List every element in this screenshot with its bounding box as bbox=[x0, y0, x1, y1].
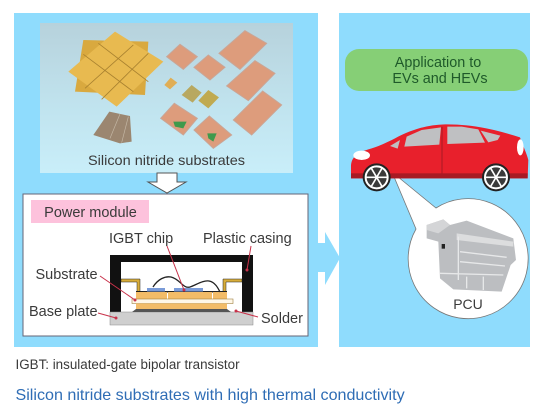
arrow: panel to panel bbox=[318, 232, 340, 285]
green circuit patterns bbox=[173, 122, 217, 142]
figure caption: Silicon nitride substrates with high thermal conductivity bbox=[16, 386, 406, 404]
heading: power module bbox=[31, 200, 149, 223]
label: substrate bbox=[36, 267, 136, 302]
label: plastic casing: Plastic casing bbox=[203, 231, 292, 247]
label: solder: Solder bbox=[261, 311, 303, 327]
panel: left materials panel bbox=[14, 13, 318, 347]
label: substrate: Substrate bbox=[36, 267, 98, 283]
small mixed substrates bbox=[164, 78, 219, 108]
heading: application to EVs and HEVs bbox=[345, 49, 528, 91]
photo caption: Silicon nitride substrates bbox=[88, 152, 245, 168]
label: IGBT chip bbox=[109, 231, 186, 292]
footnote: IGBT: insulated-gate bipolar transistor bbox=[16, 357, 240, 372]
label: solder bbox=[234, 310, 303, 327]
callout: PCU bubble: PCU bbox=[453, 296, 483, 312]
panel: power module bbox=[23, 194, 308, 336]
label: base plate: Base plate bbox=[29, 304, 98, 320]
panel: right application panel bbox=[339, 13, 530, 347]
heading: power module: Power module bbox=[44, 205, 137, 221]
grey substrate stack bbox=[93, 112, 132, 143]
heading: application to EVs and HEVs: EVs and HEVs bbox=[392, 71, 488, 87]
icon: PCU unit bbox=[427, 219, 516, 292]
arrow: down to power module bbox=[148, 173, 186, 193]
module cross-section diagram bbox=[110, 255, 253, 325]
heading: application to EVs and HEVs: Application to bbox=[395, 55, 481, 71]
orange substrates bbox=[161, 31, 282, 148]
icon: red car bbox=[351, 124, 528, 191]
photo: silicon nitride substrates bbox=[40, 23, 293, 173]
callout: PCU bubble bbox=[392, 172, 528, 319]
label: plastic casing bbox=[203, 231, 292, 272]
yellow substrate sheets bbox=[68, 32, 163, 107]
label: IGBT chip: IGBT chip bbox=[109, 231, 173, 247]
